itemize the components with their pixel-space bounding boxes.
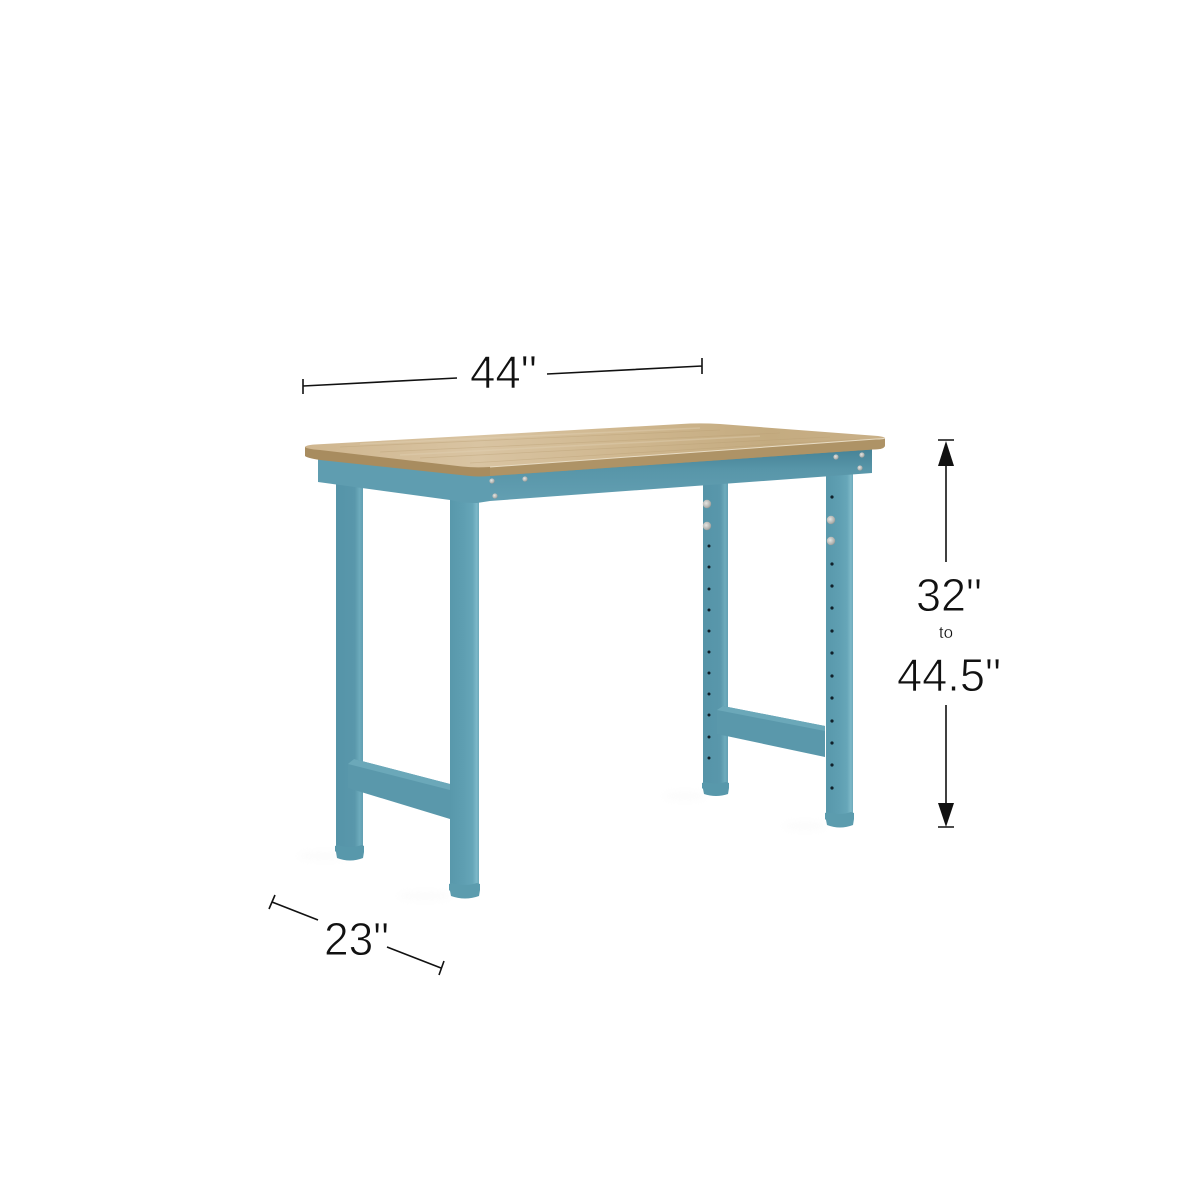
left crossbar — [348, 759, 450, 819]
rear right leg with adjustment holes — [702, 482, 729, 796]
front right leg with adjustment holes — [825, 472, 854, 828]
right crossbar — [717, 706, 825, 757]
front left leg — [449, 498, 480, 898]
apron frame — [318, 445, 872, 503]
dimension: depth 23 inches — [269, 895, 444, 975]
workbench — [305, 423, 885, 898]
label: to: to — [939, 623, 953, 642]
floor shadows — [297, 794, 827, 898]
dimension: height 32 to 44.5 inches — [897, 440, 1001, 827]
label: 32": 32" — [916, 569, 982, 621]
label: 23": 23" — [324, 913, 389, 965]
rear left leg — [335, 484, 364, 860]
apron bolts — [489, 452, 865, 499]
label: 44.5": 44.5" — [897, 649, 1001, 701]
dimension: width 44 inches — [303, 346, 702, 398]
arrowhead down — [938, 803, 954, 827]
label: 44": 44" — [470, 346, 537, 398]
bamboo tabletop — [305, 423, 885, 476]
arrowhead up — [938, 441, 954, 466]
